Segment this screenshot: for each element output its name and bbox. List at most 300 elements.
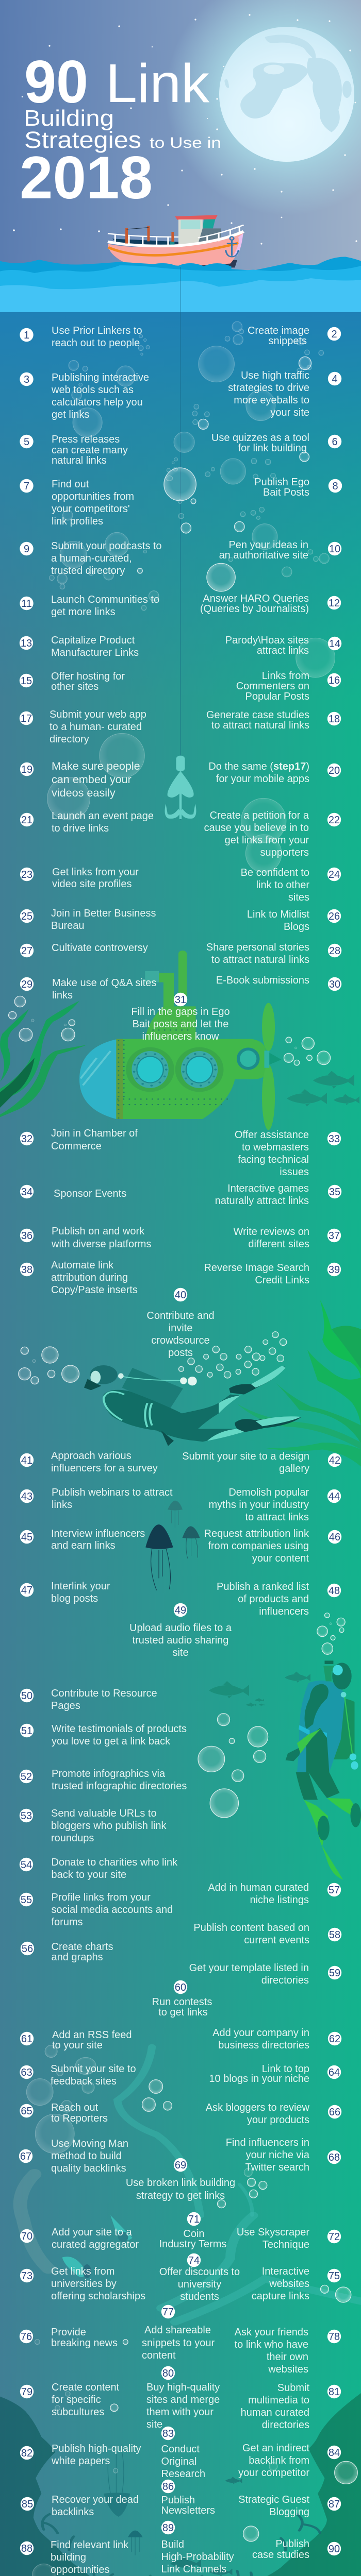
step 10: Pen your ideas in	[228, 539, 308, 551]
step 29: Make use of Q&A sites	[52, 977, 156, 989]
step 31	[131, 993, 230, 1042]
step 67: 67	[20, 2151, 31, 2162]
step 45: Interview influencers	[51, 1528, 145, 1539]
step 28: to attract natural links	[211, 954, 309, 965]
step 78: websites	[268, 2364, 308, 2375]
step 56: Create charts	[52, 1941, 113, 1953]
step 89: High-Probability	[161, 2551, 234, 2563]
step 81: Submit	[277, 2382, 309, 2394]
step 71: Coin	[183, 2228, 205, 2240]
step 48: of products and	[238, 1594, 309, 1605]
diver legs and fins	[296, 1772, 361, 1879]
step 15	[20, 671, 125, 692]
step 44	[208, 1487, 341, 1523]
step 84: backlink from	[249, 2455, 309, 2466]
step 74: university	[178, 2279, 221, 2290]
corals and jellyfish in cave	[42, 2452, 320, 2576]
step 32	[20, 1128, 138, 1152]
step 3: Publishing interactive	[52, 372, 149, 383]
step 54: 54	[21, 1859, 32, 1871]
step 16: 16	[329, 675, 340, 686]
icon: fishing line and lure	[165, 267, 196, 820]
step 72: Technique	[262, 2239, 309, 2250]
bubbles near vertical diver	[198, 1613, 345, 1818]
icon: jellyfish group	[145, 1501, 200, 1590]
step 5: 5	[24, 436, 29, 448]
step 61	[20, 2029, 132, 2051]
step 10: 10	[329, 544, 340, 555]
step 26	[247, 909, 341, 933]
step 38: Copy/Paste inserts	[51, 1284, 138, 1296]
step 21: 21	[21, 815, 32, 826]
step 13	[20, 635, 139, 658]
step 52: Promote infographics via	[52, 1768, 165, 1780]
step 11: get more links	[51, 606, 116, 618]
step 57: niche listings	[250, 1894, 309, 1906]
step 84	[238, 2443, 341, 2479]
bubbles: upper sea	[69, 321, 324, 452]
step 37: different sites	[248, 1239, 309, 1250]
title: Strategies	[24, 127, 141, 153]
step 9	[20, 540, 162, 577]
step 74: 74	[188, 2255, 200, 2266]
step 73: 73	[21, 2270, 32, 2282]
step 79: 79	[21, 2386, 32, 2398]
step 73: universities by	[51, 2278, 117, 2290]
step 42: Submit your site to a design	[182, 1451, 309, 1462]
step 40	[146, 1288, 215, 1359]
step 2: Create image	[248, 325, 309, 336]
step 32: Join in Chamber of	[51, 1128, 138, 1139]
step 24: 24	[329, 869, 340, 880]
step 4: more eyeballs to	[234, 395, 309, 406]
step 43: 43	[21, 1491, 32, 1502]
step 27: Cultivate controversy	[52, 942, 148, 954]
step 79: Create content	[52, 2382, 119, 2393]
step 88: Find relevant link	[51, 2539, 128, 2551]
step 12: (Queries by Journalists)	[200, 603, 309, 615]
step 86: 86	[162, 2481, 174, 2493]
step 11: 11	[21, 598, 32, 609]
step 44: Demolish popular	[228, 1487, 309, 1498]
title: to Use in	[150, 134, 221, 151]
step 48	[217, 1581, 341, 1617]
step 90: case studies	[252, 2549, 309, 2561]
step 24: sites	[288, 892, 309, 903]
step 16: Links from	[262, 670, 309, 682]
step 55	[20, 1892, 173, 1928]
step 23: video site profiles	[52, 878, 132, 890]
step 63: 63	[21, 2067, 32, 2078]
icon: octopus tentacles	[20, 2047, 361, 2322]
step 30: E-Book submissions	[216, 975, 309, 986]
bubbles: sea band three	[47, 733, 286, 872]
step 28	[206, 942, 341, 965]
step 80: them with your	[146, 2406, 214, 2418]
step 28: 28	[329, 945, 340, 957]
step 25: Bureau	[51, 920, 85, 931]
step 12: 12	[329, 598, 340, 609]
step 35: 35	[329, 1187, 340, 1198]
step 11: Launch Communities to	[51, 594, 159, 605]
step 88	[20, 2539, 129, 2575]
step 43: Publish webinars to attract	[52, 1487, 173, 1498]
step 73: Get links from	[51, 2266, 114, 2277]
step 51: Write testimonials of products	[52, 1723, 187, 1735]
step 40: invite	[169, 1323, 192, 1334]
step 5	[20, 434, 128, 466]
step 88: 88	[21, 2543, 32, 2554]
step 55: social media accounts and	[52, 1904, 173, 1916]
step 35: naturally attract links	[215, 1195, 309, 1207]
step 51	[20, 1723, 187, 1747]
step 39: Credit Links	[255, 1275, 309, 1286]
step 51: you love to get a link back	[52, 1736, 171, 1747]
step 44: myths in your industry	[208, 1499, 309, 1511]
step 34: 34	[21, 1187, 32, 1198]
step 69: 69	[175, 2160, 186, 2171]
step 55: forums	[52, 1917, 83, 1928]
step 22: supporters	[260, 847, 309, 858]
step 87: Blogging	[269, 2506, 309, 2518]
step 64: Link to top	[262, 2063, 309, 2075]
step 50	[20, 1688, 157, 1711]
step 83: Conduct	[161, 2444, 200, 2455]
step 8: Publish Ego	[254, 477, 309, 488]
step 76: Provide	[51, 2327, 86, 2338]
step 79: for specific	[52, 2394, 101, 2405]
step 9: trusted directory	[51, 565, 125, 577]
step 11	[20, 594, 159, 618]
step 64: 10 blogs in your niche	[209, 2073, 309, 2084]
step 5: can create many	[52, 445, 128, 456]
step 8: 8	[332, 481, 338, 492]
step 36	[20, 1226, 151, 1250]
step 46: from companies using	[208, 1540, 309, 1552]
step 56: and graphs	[52, 1952, 103, 1963]
seaweed: left of submarine	[0, 1001, 86, 1117]
step 71: 71	[188, 2214, 200, 2225]
step 57	[208, 1882, 341, 1906]
step 41: 41	[21, 1455, 32, 1466]
step 85	[21, 2494, 139, 2518]
step 4	[228, 370, 341, 418]
stars	[13, 14, 357, 245]
step 3: web tools such as	[51, 384, 134, 396]
step 26: Link to Midlist	[247, 909, 309, 920]
step 22: Create a petition for a	[210, 810, 309, 821]
step 7: 7	[24, 481, 29, 492]
step 46: Request attribution link	[204, 1528, 309, 1539]
step 22: 22	[329, 815, 340, 826]
step 34: Sponsor Events	[54, 1188, 126, 1199]
step 16	[236, 670, 341, 702]
step 26: 26	[329, 911, 340, 922]
step 59	[189, 1962, 341, 1986]
step 82: 82	[21, 2448, 32, 2459]
step 12	[200, 593, 341, 615]
icon: scuba diver vertical	[286, 1660, 358, 1772]
title: 90	[24, 48, 88, 115]
step 56	[21, 1941, 113, 1963]
step 89: 89	[162, 2522, 174, 2534]
step 52: trusted infographic directories	[52, 1781, 187, 1792]
step 33: issues	[280, 1166, 309, 1178]
step 19: videos easily	[52, 786, 116, 799]
step 16: Popular Posts	[245, 691, 309, 702]
step 61: to your site	[52, 2040, 103, 2051]
step 53: 53	[21, 1810, 32, 1822]
step 13: Manufacturer Links	[51, 647, 139, 658]
step 24: Be confident to	[241, 867, 309, 878]
step 52: 52	[21, 1771, 32, 1783]
step 38	[20, 1260, 138, 1296]
step 21: Launch an event page	[52, 810, 154, 822]
step 39: Reverse Image Search	[204, 1262, 309, 1274]
step 36: 36	[21, 1230, 32, 1242]
step 39: 39	[329, 1264, 340, 1276]
step 47: 47	[21, 1585, 32, 1596]
step 88: building	[51, 2552, 86, 2563]
step 54: back to your site	[52, 1869, 126, 1880]
step 63	[20, 2063, 136, 2087]
step 22: get links from your	[225, 835, 309, 846]
step 67: Use Moving Man	[51, 2138, 128, 2149]
step 10	[219, 539, 341, 561]
step 81	[241, 2382, 341, 2431]
step 59: directories	[261, 1975, 309, 1986]
step 85: 85	[22, 2499, 33, 2510]
bubbles around swimming diver	[19, 1332, 287, 1384]
step 69: strategy to get links	[136, 2190, 225, 2201]
step 75	[252, 2266, 341, 2302]
step 37	[234, 1226, 341, 1250]
step 84: 84	[329, 2447, 340, 2459]
step 63: Submit your site to	[51, 2063, 136, 2075]
step 13: Capitalize Product	[51, 635, 135, 646]
step 78: to link who have	[235, 2339, 308, 2350]
step 33: facing technical	[238, 1154, 309, 1165]
step 36: Publish on and work	[52, 1226, 144, 1237]
step 38: 38	[21, 1264, 32, 1276]
step 4: Use high traffic	[241, 370, 309, 381]
step 43	[20, 1487, 173, 1511]
step 89: Link Channels	[161, 2564, 226, 2575]
step 41	[20, 1450, 158, 1474]
step 40: Contribute and	[146, 1310, 215, 1321]
step 31: Bait posts and let the	[133, 1019, 228, 1030]
step 30: 30	[329, 979, 340, 990]
step 84: your competitor	[238, 2467, 309, 2479]
step 86	[161, 2480, 215, 2516]
step 78: their own	[267, 2351, 308, 2363]
step 81: multimedia to	[248, 2395, 309, 2406]
step 33: to webmasters	[242, 1142, 309, 1153]
step 70	[20, 2227, 139, 2250]
step 2	[248, 325, 341, 347]
step 7: Find out	[52, 479, 89, 490]
step 54: Donate to charities who link	[52, 1857, 177, 1868]
step 53: bloggers who publish link	[51, 1820, 167, 1832]
step 38: attribution during	[51, 1272, 128, 1283]
step 76	[20, 2327, 118, 2349]
step 53: Send valuable URLs to	[51, 1808, 157, 1819]
step 18: 18	[329, 714, 340, 725]
step 37: 37	[329, 1230, 340, 1242]
step 81: directories	[262, 2419, 309, 2431]
step 36: with diverse platforms	[51, 1239, 151, 1250]
step 31: Fill in the gaps in Ego	[131, 1006, 230, 1018]
step 51: 51	[21, 1725, 32, 1737]
step 6: for link building	[238, 443, 307, 454]
step 83: Research	[161, 2468, 205, 2480]
step 66	[206, 2102, 341, 2126]
step 82: white papers	[51, 2455, 110, 2467]
step 69	[126, 2158, 235, 2201]
step 78: Ask your friends	[235, 2327, 308, 2338]
step 29: 29	[21, 979, 32, 990]
step 80: Buy high-quality	[146, 2382, 220, 2393]
step 75: capture links	[252, 2291, 309, 2302]
step 46	[204, 1528, 341, 1564]
step 65: to Reporters	[51, 2113, 108, 2124]
step 71: Industry Terms	[159, 2239, 226, 2250]
title	[20, 48, 221, 211]
step 60: 60	[175, 1982, 186, 1993]
step 65	[20, 2102, 108, 2124]
step 17: 17	[21, 713, 32, 724]
step 48: influencers	[259, 1606, 309, 1617]
step 53: roundups	[51, 1833, 94, 1844]
step 84: Get an indirect	[242, 2443, 309, 2454]
icon: full moon	[219, 27, 354, 162]
step 57: 57	[329, 1885, 340, 1896]
step 8: Bait Posts	[263, 487, 309, 498]
bubbles in cave	[25, 2461, 359, 2576]
step 55: 55	[21, 1894, 32, 1906]
step 68: 68	[329, 2152, 340, 2163]
step 78: 78	[329, 2331, 340, 2343]
step 14: Parody\Hoax sites	[225, 635, 309, 646]
fish school mid sea	[209, 1671, 310, 1707]
step 46: your content	[252, 1553, 309, 1564]
step 49: 49	[175, 1605, 186, 1616]
step 41: influencers for a survey	[51, 1463, 158, 1474]
step 87	[238, 2494, 341, 2518]
step 73	[20, 2266, 145, 2302]
step 67: method to build	[51, 2150, 122, 2162]
step 72	[237, 2227, 341, 2250]
step 67: quality backlinks	[51, 2163, 126, 2174]
panel: sea cave silhouette	[0, 2393, 361, 2576]
icon: fishing boat	[108, 215, 243, 267]
step 58: Publish content based on	[193, 1922, 309, 1934]
step 87: 87	[329, 2499, 340, 2510]
step 19: 19	[21, 764, 32, 775]
step 33: 33	[329, 1133, 340, 1145]
step 3: 3	[24, 374, 29, 385]
step 70: curated aggregator	[52, 2239, 139, 2250]
step 69: Use broken link building	[126, 2177, 235, 2189]
step 4: 4	[332, 374, 338, 385]
step 62	[212, 2027, 341, 2051]
step 41: Approach various	[51, 1450, 132, 1462]
step 67	[19, 2138, 128, 2174]
step 59: 59	[329, 1968, 340, 1979]
step 7: link profiles	[52, 516, 103, 527]
step 54	[20, 1857, 178, 1880]
step 30	[216, 975, 341, 991]
step 77	[142, 2305, 215, 2361]
step 62: 62	[329, 2033, 340, 2045]
panel: night sky	[0, 0, 361, 273]
step 39	[204, 1262, 341, 1286]
step 83: Original	[161, 2456, 196, 2467]
step 44: 44	[329, 1491, 340, 1502]
step 80	[146, 2366, 220, 2430]
icon: scuba diver swimming	[84, 1365, 302, 1446]
step 79	[20, 2382, 120, 2418]
step 40: posts	[168, 1347, 193, 1359]
step 80: site	[146, 2419, 162, 2430]
step 37: Write reviews on	[234, 1226, 309, 1238]
step 58: 58	[329, 1929, 340, 1941]
step 87: Strategic Guest	[238, 2494, 309, 2505]
step 38: Automate link	[51, 1260, 113, 1271]
step 74: Offer discounts to	[159, 2266, 240, 2278]
step 62: Add your company in	[212, 2027, 309, 2039]
step 89: Build	[161, 2539, 184, 2550]
title: Link	[106, 53, 210, 114]
step 80: 80	[162, 2368, 174, 2379]
step 77: 77	[162, 2307, 174, 2318]
step 3	[20, 372, 149, 420]
step 1: reach out to people	[52, 337, 140, 349]
step 49	[129, 1603, 232, 1658]
step 40: 40	[175, 1290, 186, 1301]
icon: submarine	[79, 951, 282, 1130]
step 70: Add your site to a	[52, 2227, 132, 2238]
step 76: 76	[21, 2331, 32, 2343]
step 58	[193, 1922, 341, 1946]
title: 2018	[20, 144, 153, 211]
step 50: Contribute to Resource	[51, 1688, 157, 1699]
step 90: Publish	[275, 2538, 309, 2550]
step 17: directory	[50, 734, 89, 745]
step 20: for your mobile apps	[216, 773, 309, 785]
step 66: 66	[329, 2107, 340, 2118]
step 31: influencers know	[142, 1031, 219, 1042]
step 13: 13	[21, 638, 32, 649]
step 82: Publish high-quality	[52, 2443, 141, 2454]
step 74: students	[180, 2291, 219, 2302]
step 7	[20, 479, 134, 527]
step 83	[161, 2427, 205, 2480]
tentacle suckers	[62, 2215, 133, 2278]
step 15: other sites	[51, 681, 99, 692]
step 21: to drive links	[52, 823, 109, 834]
step 22	[204, 810, 341, 858]
step 74	[159, 2253, 240, 2302]
step 80: sites and merge	[146, 2394, 220, 2405]
step 25	[20, 908, 156, 931]
step 65: 65	[21, 2106, 32, 2117]
step 60	[152, 1980, 212, 2018]
bubbles: lower sea band two	[35, 2285, 351, 2412]
step 22: cause you believe in to	[204, 822, 309, 834]
step 14: 14	[329, 638, 340, 650]
seaweed: right side	[237, 1300, 361, 1467]
